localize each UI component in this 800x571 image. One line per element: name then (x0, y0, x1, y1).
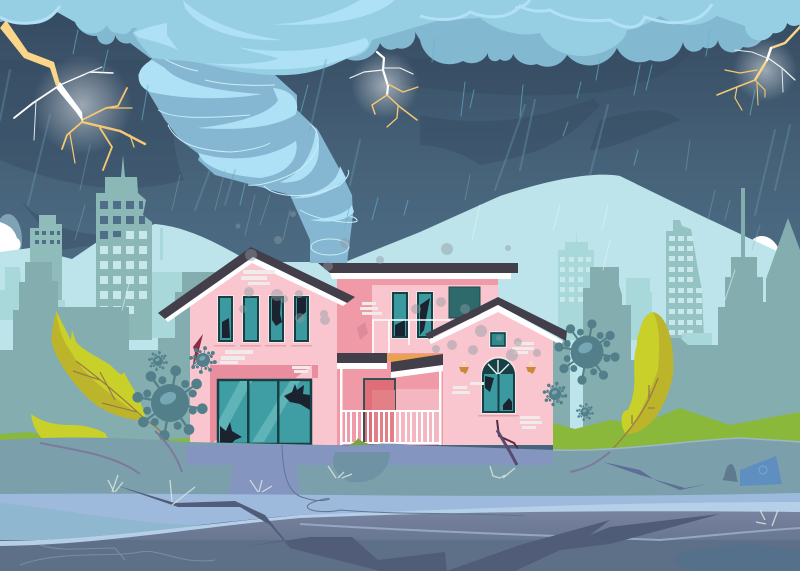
upper windows left wing (214, 295, 312, 346)
house (158, 247, 567, 455)
right wing wall (443, 309, 553, 445)
swirl band 3 (198, 141, 297, 178)
road (0, 511, 800, 571)
bright band (0, 502, 800, 546)
water surface edge (553, 438, 800, 450)
near right skyline (637, 188, 800, 440)
front cloud layer center (133, 0, 800, 75)
background clouds peeking out (0, 214, 780, 266)
tall right tower (666, 220, 704, 340)
flood water (0, 430, 800, 571)
porch roof right (391, 354, 443, 378)
storm cloud (0, 0, 800, 75)
broken beam (387, 354, 443, 362)
arched window (478, 356, 519, 416)
virus large right (555, 320, 619, 384)
left pool (0, 503, 200, 541)
grass left (0, 432, 190, 450)
sunken bell (722, 464, 738, 482)
tornado (138, 50, 357, 263)
swirl band 4 (280, 127, 319, 183)
pale block (626, 278, 712, 345)
leaf right (610, 312, 673, 452)
road dark puddle (675, 545, 800, 571)
crack fork (590, 514, 720, 544)
tall right tower windows (669, 236, 702, 335)
far left city (0, 155, 182, 340)
swirl band 2 (197, 88, 297, 129)
near strip by house (553, 340, 570, 440)
porch door (364, 379, 395, 445)
back cloud layer (0, 0, 800, 67)
bolt branches (717, 27, 800, 110)
hose (282, 445, 525, 516)
water surface (0, 438, 800, 500)
small attic window (489, 331, 507, 348)
lightning center (350, 51, 419, 127)
virus right small 1 (543, 382, 567, 406)
pale mid towers (152, 228, 182, 338)
grass right (553, 408, 800, 450)
submerged stems (40, 430, 610, 474)
cloud rim highlights (0, 0, 712, 27)
virus small left (148, 351, 168, 371)
left wing wall (190, 260, 337, 445)
virus large left (134, 367, 206, 439)
porch railing (341, 410, 441, 444)
garage surround (210, 365, 318, 445)
right gable roof (425, 297, 567, 345)
rain (0, 30, 790, 310)
front cloud layer left (0, 0, 200, 34)
virus on wall (190, 347, 216, 373)
virus right small 2 (576, 403, 594, 421)
lightning glow (351, 51, 419, 119)
swirl band 5 (290, 166, 346, 198)
near left city silhouette (0, 262, 215, 440)
porch posts (340, 369, 442, 445)
mountains (0, 175, 800, 440)
bottom left cracked tiles (20, 545, 215, 565)
flat roof (318, 263, 518, 279)
inner cloud swirls (133, 0, 395, 69)
grass tufts (108, 466, 778, 526)
far building (30, 215, 62, 300)
debris particles (236, 211, 541, 361)
swirl band 1 (139, 60, 262, 98)
far building windows (35, 231, 60, 244)
sky background (0, 0, 800, 300)
right city (553, 188, 800, 440)
lightning glow (32, 55, 132, 155)
large upper window (449, 287, 480, 318)
swirl lines (150, 50, 357, 255)
exposed bricks (220, 270, 542, 429)
house reflection (186, 444, 553, 495)
sunken box (740, 456, 782, 486)
bolt branches (14, 67, 145, 170)
upper right wall (372, 285, 498, 353)
funnel body (138, 58, 353, 263)
crack right (603, 462, 708, 490)
leaf left small (31, 414, 110, 442)
pale tower (558, 228, 594, 340)
garage window (218, 380, 311, 444)
dark storm bands (0, 40, 700, 250)
middle wall dark (337, 275, 498, 445)
bush reflection (333, 452, 390, 482)
leaf left large (51, 311, 147, 421)
upper windows center (391, 291, 434, 339)
wall cracks (192, 322, 522, 455)
lower road (0, 540, 800, 571)
distant light pool (0, 493, 800, 541)
rain over mountain (122, 205, 735, 310)
soft rain streaks (0, 60, 790, 215)
tower windows (100, 201, 145, 239)
lightning glow (733, 38, 797, 102)
lightning left (0, 20, 145, 170)
bright rain streaks (73, 30, 755, 230)
balcony railing (373, 320, 450, 353)
main bolt upper (0, 20, 60, 86)
wall lamps (459, 361, 536, 374)
bush (346, 438, 392, 452)
big ground crack (115, 485, 610, 571)
main bolt lower (56, 82, 83, 122)
left gable roof (158, 247, 355, 322)
porch back wall (341, 369, 441, 445)
thin rain streaks (75, 140, 760, 250)
near right silhouette (583, 267, 637, 440)
porch roof left (337, 353, 387, 369)
lightning right (717, 27, 800, 110)
pale towers (0, 267, 65, 320)
swirl band 6 (310, 205, 354, 222)
bolt branches (350, 52, 418, 127)
stem left leaf (147, 421, 188, 472)
pale tower windows (560, 257, 591, 302)
road highlight (300, 524, 800, 540)
tall left tower (96, 155, 152, 340)
